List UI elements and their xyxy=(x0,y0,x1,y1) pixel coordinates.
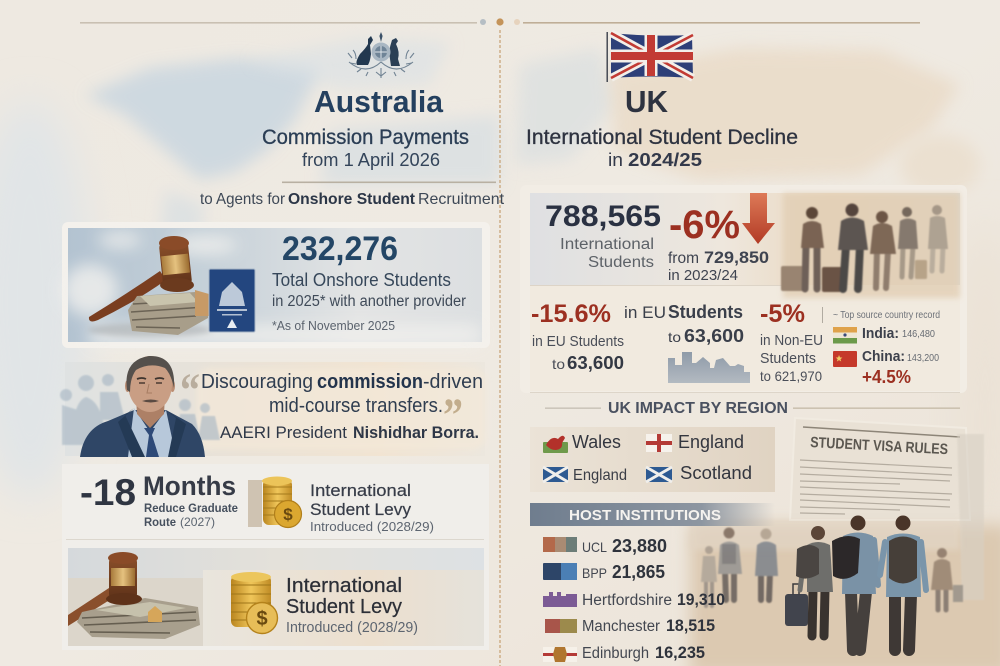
row: Manchester: Manchester xyxy=(582,618,660,635)
icon: UK flag xyxy=(606,32,693,82)
stat: minus 15.6 percent: to xyxy=(552,356,565,372)
text: international student levy large xyxy=(286,575,418,636)
panel: quote from AAERI president xyxy=(60,356,486,457)
subheading: Commission Payments: Commission Payments xyxy=(262,126,469,149)
row: China: 143,200 xyxy=(907,352,939,364)
text: agents for onshore student recruitment: to Agents for xyxy=(200,191,286,208)
row: UCL: 23,880 xyxy=(612,536,667,556)
foreground students xyxy=(785,516,926,650)
row: Scottish flag, England label: England xyxy=(573,467,627,484)
text: agents for onshore student recruitment: Onshore Student xyxy=(288,191,416,208)
stat: minus 15.6 percent: 63,600 xyxy=(567,353,624,373)
quote text: ” xyxy=(443,389,463,442)
text: international student levy small: International xyxy=(310,482,411,500)
row: India xyxy=(833,326,935,344)
panel: regions xyxy=(530,427,775,492)
panel: host institutions xyxy=(530,503,775,662)
stat: minus 6 percent: -6% xyxy=(669,203,740,247)
text: from 729,850 in 2023/24: in 2023/24 xyxy=(668,267,738,284)
quote text xyxy=(180,364,483,442)
text: from 729,850 in 2023/24: 729,850 xyxy=(704,248,769,267)
stat: minus 18 months: (2027) xyxy=(180,515,215,529)
text: from 729,850 in 2023/24: from xyxy=(668,250,699,267)
row: BPP: BPP xyxy=(582,565,607,581)
quote text: “ xyxy=(180,364,200,417)
document: student visa rules: STUDENT VISA RULES xyxy=(810,434,948,458)
background crowd xyxy=(60,374,220,445)
stat: 788,565 international students: Students xyxy=(588,254,654,271)
row: Hertfordshire: Hertfordshire xyxy=(582,592,672,609)
subheading: in 2024/25: in xyxy=(608,150,623,170)
attribution: AAERI President xyxy=(220,423,347,442)
row: Scottish flag, England label xyxy=(543,467,627,484)
text: from 729,850 in 2023/24 xyxy=(668,248,769,284)
stat: minus 18 months: Months xyxy=(143,471,236,501)
row: Wales: Wales xyxy=(572,432,621,452)
label: total onshore students: Total Onshore Students xyxy=(272,270,451,290)
icon: gavel on money with passport xyxy=(88,236,255,337)
row: Manchester: 18,515 xyxy=(666,616,715,635)
stat: minus 18 months xyxy=(80,471,238,529)
row: India: India: xyxy=(862,326,899,342)
label: top source country record: ~ Top source country record xyxy=(833,310,940,321)
stat: 232,276: 232,276 xyxy=(282,230,398,268)
stat: minus 18 months: -18 xyxy=(80,472,136,513)
text: international student levy small: Student Levy xyxy=(310,501,412,519)
row: Edinburgh: 16,235 xyxy=(655,643,705,662)
stat: 788,565 international students: International xyxy=(560,236,654,253)
stat: minus 5 percent: Students xyxy=(760,350,816,367)
stat: minus 18 months: Reduce Graduate xyxy=(144,501,238,515)
quote text: commission xyxy=(317,371,423,393)
stat: in EU students to 63,600: Students xyxy=(668,302,743,322)
row: BPP: 21,865 xyxy=(612,562,665,582)
background walkers xyxy=(701,528,963,610)
row: Edinburgh: Edinburgh xyxy=(582,645,649,662)
icon: coin stack xyxy=(231,572,278,634)
text: international student levy large: International xyxy=(286,575,402,597)
document: student visa rules xyxy=(790,418,984,600)
footnote: as of November 2025: *As of November 2025 xyxy=(272,319,395,333)
subheading: in 2024/25 xyxy=(608,150,702,170)
text: international student levy small: Introduced (2028/29) xyxy=(310,520,434,534)
stat: minus 5 percent: in Non-EU xyxy=(760,332,823,349)
stat: 788,565 international students xyxy=(545,200,661,271)
subheading: in 2024/25: 2024/25 xyxy=(628,150,702,170)
icon: gavel on money xyxy=(68,552,203,646)
heading: UK impact by region: UK IMPACT BY REGION xyxy=(608,400,788,417)
banner: HOST INSTITUTIONS xyxy=(569,507,721,524)
quote text: Discouraging xyxy=(201,371,313,393)
stat: minus 15.6 percent xyxy=(531,300,624,373)
text: international student levy large: Student Levy xyxy=(286,596,402,618)
stat: in EU students to 63,600: to xyxy=(668,329,681,345)
label: in 2025 with another provider: in 2025* with another provider xyxy=(272,293,466,310)
stat: minus 5 percent xyxy=(760,300,823,384)
row: Manchester xyxy=(545,616,715,635)
row: UCL: UCL xyxy=(582,539,607,555)
text: agents for onshore student recruitment: Recruitment xyxy=(418,191,505,208)
stat: minus 5 percent: to 621,970 xyxy=(760,368,822,384)
banner xyxy=(530,503,775,526)
rule under Australia heading xyxy=(282,182,496,183)
attribution xyxy=(220,423,479,442)
stat: minus 5 percent: -5% xyxy=(760,300,805,328)
text: international student levy large: Introduced (2028/29) xyxy=(286,620,418,636)
stat: plus 4.5 percent: +4.5% xyxy=(862,367,911,387)
row: Hertfordshire xyxy=(543,590,725,609)
heading: UK: UK xyxy=(625,84,669,119)
row: UCL xyxy=(543,536,667,556)
subheading: International Student Decline: International Student Decline xyxy=(526,126,798,149)
top rule with dots xyxy=(80,18,920,26)
icon: Australian coat of arms xyxy=(348,32,414,78)
text: international student levy small xyxy=(310,482,434,534)
icon: gold coins: $ xyxy=(283,505,293,524)
photo: students with luggage xyxy=(781,193,960,298)
row: Hertfordshire: 19,310 xyxy=(677,590,725,609)
stat: in EU students to 63,600: 63,600 xyxy=(684,326,744,346)
row: BPP xyxy=(543,562,665,582)
stat: minus 15.6 percent: in EU Students xyxy=(532,333,624,350)
row: China: China: xyxy=(862,349,905,365)
row: Edinburgh xyxy=(543,643,705,662)
row: India: 146,480 xyxy=(902,328,935,340)
row: England: England xyxy=(678,432,744,452)
row: Scotland xyxy=(646,463,752,483)
panel: total onshore students xyxy=(62,222,490,348)
row: Scotland: Scotland xyxy=(680,463,752,483)
portrait: Nishidhar Borra xyxy=(80,356,205,457)
stat: 788,565 international students: 788,565 xyxy=(545,200,661,233)
stat: minus 18 months: Route xyxy=(144,515,176,529)
icon: coin stack: $ xyxy=(256,608,268,630)
center dashed divider xyxy=(499,30,501,666)
stat: in EU students to 63,600 xyxy=(624,302,744,346)
sub-panel: levy with gavel xyxy=(68,548,484,646)
row: China xyxy=(833,349,939,367)
icon: red down arrow xyxy=(742,193,775,244)
stat: minus 15.6 percent: -15.6% xyxy=(531,300,611,328)
row: Wales xyxy=(543,432,621,453)
heading: Australia: Australia xyxy=(314,84,444,119)
stat: in EU students to 63,600: in EU xyxy=(624,303,666,322)
quote text: -driven xyxy=(423,371,483,393)
photo: concourse with students and visa rules xyxy=(690,418,1000,666)
panel: graduate route and levy xyxy=(62,464,489,650)
icon: gold coins xyxy=(248,476,302,528)
panel: UK headline stats xyxy=(520,185,967,393)
attribution: Nishidhar Borra. xyxy=(353,423,479,442)
row: England xyxy=(646,432,744,452)
chart icon: skyline xyxy=(668,352,750,383)
subheading: from 1 April 2026: from 1 April 2026 xyxy=(302,150,440,170)
quote text: mid-course transfers. xyxy=(269,395,443,417)
text: agents for onshore student recruitment xyxy=(200,191,505,208)
